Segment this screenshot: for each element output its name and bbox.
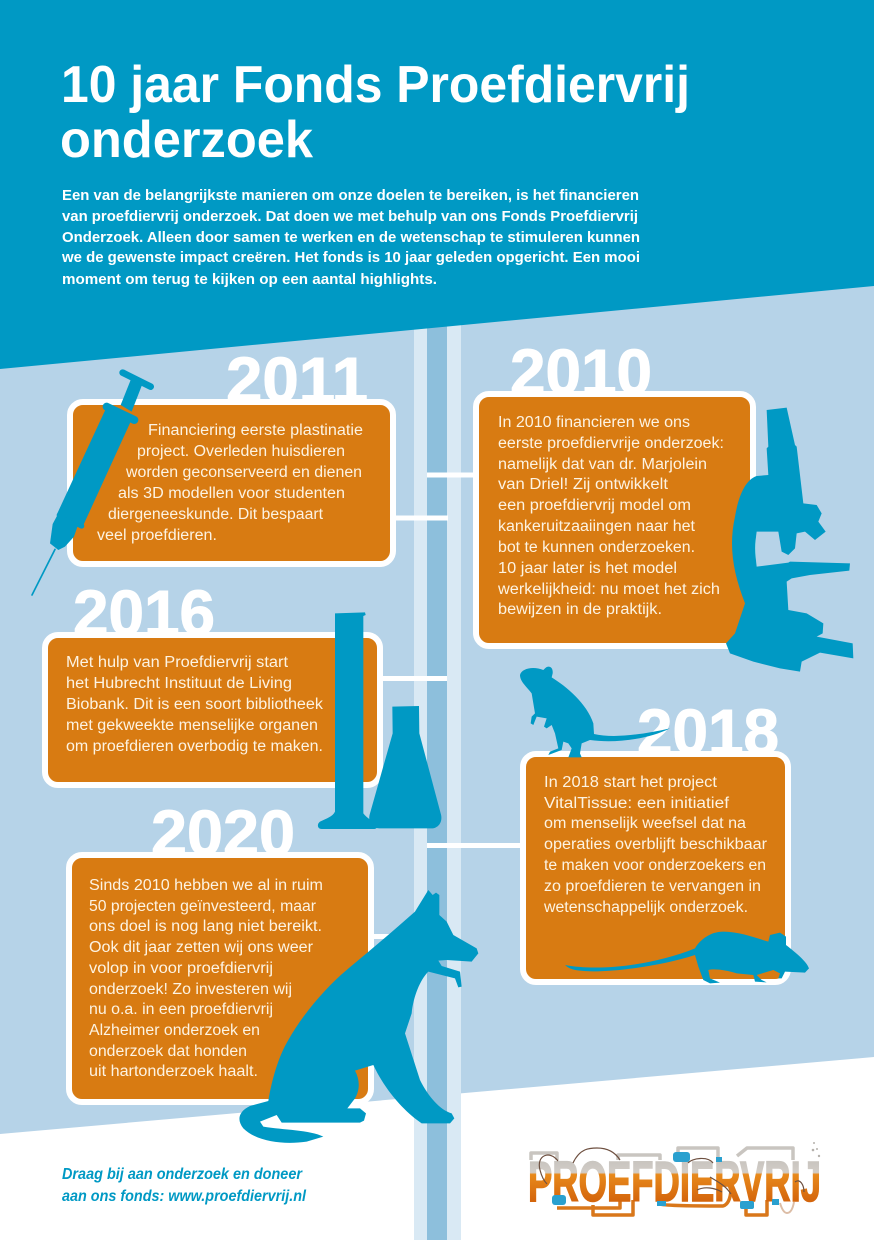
icon: mouse (565, 932, 809, 983)
text: 2016: het Hubrecht Instituut de Living (66, 675, 292, 692)
text: 2020: Sinds 2010 hebben we al in ruim (89, 877, 323, 894)
year 2016: 2016 (73, 577, 215, 649)
year 2011: 2011 (226, 344, 368, 416)
text: 2018 (543, 774, 767, 916)
icon: measuring cylinder (318, 612, 377, 829)
logo pipes (531, 1148, 794, 1215)
text: 2020: onderzoek! Zo investeren wij (89, 981, 292, 998)
title: onderzoek (60, 111, 313, 169)
text: 2018: om menselijk weefsel dat na (544, 815, 746, 832)
text: 2010: een proefdiervrij model om (498, 497, 691, 514)
text: 2018: te maken voor onderzoekers en (544, 857, 766, 874)
panel: 2020 (69, 855, 371, 1102)
text: 2020: nu o.a. in een proefdiervrij (89, 1001, 273, 1018)
white footer area (0, 1057, 874, 1240)
text: 2020: onderzoek dat honden (89, 1043, 247, 1060)
intro text (61, 188, 640, 288)
year 2010: 2010 (510, 336, 652, 408)
text: 2010: namelijk dat van dr. Marjolein (498, 456, 707, 473)
text: 2020: 50 projecten geïnvesteerd, maar (89, 898, 316, 915)
top header band (0, 0, 874, 369)
logo tubing (539, 1148, 804, 1194)
text: 2020: uit hartonderzoek haalt. (89, 1063, 258, 1080)
text: 2020: volop in voor proefdiervrij (89, 960, 273, 977)
text: 2018: operaties overblijft beschikbaar (544, 836, 767, 853)
text: 2020: ons doel is nog lang niet bereikt. (89, 918, 322, 935)
icon: erlenmeyer flask (369, 706, 441, 828)
panel: 2016 (45, 635, 380, 785)
intro text: we de gewenste impact creëren. Het fonds is 10 jaar geleden opgericht. Een mooi (61, 250, 640, 266)
call to action: aan ons fonds: www.proefdiervrij.nl (62, 1188, 307, 1205)
background panel (0, 280, 874, 1140)
year 2020: 2020 (151, 797, 295, 869)
text: 2011: diergeneeskunde. Dit bespaart (108, 506, 324, 523)
text: 2020: Ook dit jaar zetten wij ons weer (89, 939, 313, 956)
intro text: Een van de belangrijkste manieren om onze doelen te bereiken, is het financieren (62, 188, 639, 204)
text: 2011: veel proefdieren. (97, 527, 217, 544)
text: 2018: wetenschappelijk onderzoek. (543, 899, 748, 916)
text: 2016: Biobank. Dit is een soort bibliotheek (66, 696, 323, 713)
call to action (62, 1166, 307, 1205)
text: 2010: van Driel! Zij ontwikkelt (498, 476, 669, 493)
text: 2010: 10 jaar later is het model (498, 560, 677, 577)
text: 2016: met gekweekte menselijke organen (66, 717, 318, 734)
text: 2011: als 3D modellen voor studenten (118, 485, 345, 502)
text: 2010: eerste proefdiervrije onderzoek: (498, 435, 724, 452)
logo: Proefdiervrij (528, 1142, 821, 1215)
text: 2018: In 2018 start het project (544, 774, 718, 791)
text: 2010: kankeruitzaaiingen naar het (498, 518, 696, 535)
central timeline (372, 320, 523, 1240)
text: 2011: project. Overleden huisdieren (137, 443, 345, 460)
panel: 2010 (476, 394, 753, 646)
text: 2010: bewijzen in de praktijk. (498, 601, 662, 618)
panel: 2011 (70, 402, 393, 564)
text: 2018: zo proefdieren te vervangen in (544, 878, 761, 895)
year 2018: 2018 (637, 696, 779, 768)
intro text: Onderzoek. Alleen door samen te werken en de wetenschap te stimuleren kunnen (62, 230, 640, 246)
icon: cylinder and flask (318, 612, 441, 829)
text: 2010 (497, 414, 724, 618)
icon: standing rat (520, 667, 670, 757)
text: 2016 (66, 654, 323, 755)
text: 2016: om proefdieren overbodig te maken. (66, 738, 323, 755)
panel: 2018 (523, 754, 788, 982)
logo valves (552, 1152, 779, 1209)
intro text: moment om terug te kijken op een aantal highlights. (62, 272, 437, 288)
text: 2010: werkelijkheid: nu moet het zich (497, 581, 720, 598)
intro text: van proefdiervrij onderzoek. Dat doen we met behulp van ons Fonds Proefdiervrij (62, 209, 638, 225)
text: 2020: Alzheimer onderzoek en (89, 1022, 260, 1039)
title (60, 56, 690, 169)
icon: syringe (32, 373, 151, 595)
text: 2010: In 2010 financieren we ons (498, 414, 690, 431)
icon: dog (239, 890, 478, 1143)
logo bubbles (812, 1142, 820, 1157)
text: 2011: Financiering eerste plastinatie (148, 422, 363, 439)
icon: microscope (726, 408, 853, 672)
title: 10 jaar Fonds Proefdiervrij (61, 56, 690, 114)
text: 2011: worden geconserveerd en dienen (125, 464, 362, 481)
text: 2020 (89, 877, 323, 1080)
call to action: Draag bij aan onderzoek en doneer (62, 1166, 303, 1183)
text: 2010: bot te kunnen onderzoeken. (498, 539, 695, 556)
text: 2018: VitalTissue: een initiatief (544, 795, 730, 812)
text: 2011 (97, 422, 363, 544)
text: 2016: Met hulp van Proefdiervrij start (66, 654, 289, 671)
